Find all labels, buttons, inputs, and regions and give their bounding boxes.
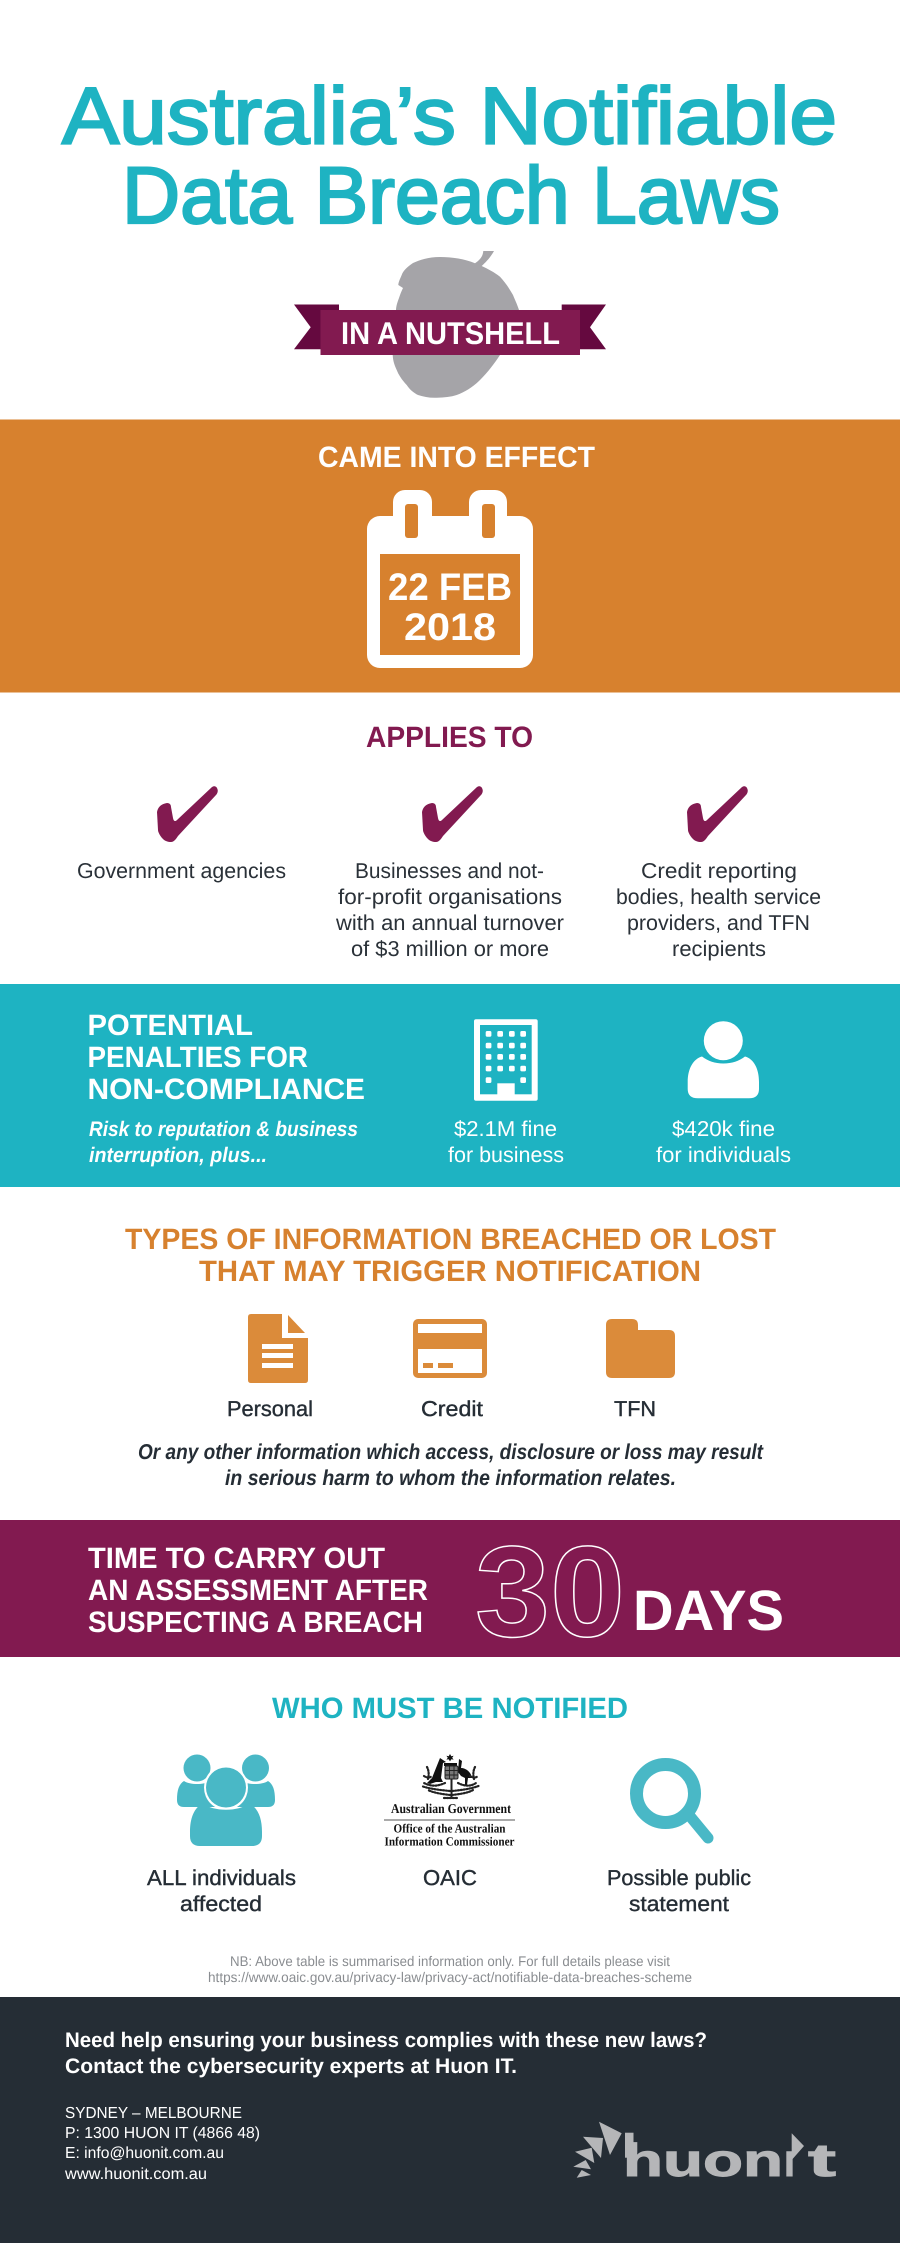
text: credit reporting — [616, 859, 821, 961]
logo: huonit: i — [784, 2134, 795, 2186]
text: business fine: $2.1M fine — [454, 1117, 557, 1141]
icon: check mark 3 — [687, 786, 748, 842]
text: other information — [138, 1440, 764, 1490]
heading: potential penalties: NON-COMPLIANCE — [88, 1073, 365, 1106]
calendar date — [388, 566, 512, 649]
label: public statement — [607, 1866, 751, 1916]
text: credit reporting: Credit reporting — [641, 859, 797, 883]
label: all individuals: ALL individuals — [147, 1866, 296, 1890]
icon: check mark 1 — [157, 786, 218, 842]
label: all individuals — [147, 1866, 296, 1916]
heading: applies to: APPLIES TO — [366, 721, 533, 754]
label: all individuals: affected — [180, 1892, 262, 1916]
crest — [422, 1754, 478, 1798]
heading: time to carry out: AN ASSESSMENT AFTER — [88, 1574, 428, 1607]
text: credit reporting: bodies, health service — [616, 885, 821, 909]
heading: potential penalties — [88, 1009, 365, 1106]
label: personal: Personal — [227, 1397, 313, 1421]
text: government agencies: Government agencies — [77, 859, 286, 883]
text: businesses: for-profit organisations — [338, 885, 562, 909]
ribbon band — [320, 310, 580, 355]
text: business fine: for business — [448, 1143, 564, 1167]
text: businesses: Businesses and not- — [355, 859, 544, 883]
call to action: Need help ensuring your business complies with these new laws? — [65, 2029, 707, 2052]
calendar date: 22 FEB — [388, 566, 512, 609]
panel: footer — [0, 1997, 900, 2243]
calendar date: 2018 — [404, 606, 496, 649]
icon: document — [248, 1314, 308, 1383]
label: public statement: Possible public — [607, 1866, 751, 1890]
contact details: E: info@huonit.com.au — [65, 2145, 224, 2162]
text: other information: Or any other information which access, disclosure or loss may result — [138, 1440, 764, 1464]
ribbon tail right — [562, 304, 606, 349]
contact details: www.huonit.com.au — [64, 2166, 207, 2183]
call to action — [65, 2029, 707, 2078]
icon: folder — [606, 1319, 675, 1378]
number: 30 outline: 30 — [475, 1520, 625, 1664]
logo: huonit: t — [808, 2134, 836, 2186]
contact details: SYDNEY – MELBOURNE — [65, 2105, 242, 2122]
text: credit reporting: providers, and TFN — [627, 911, 810, 935]
heading: potential penalties: PENALTIES FOR — [88, 1041, 308, 1074]
heading: time to carry out: TIME TO CARRY OUT — [88, 1542, 385, 1575]
text: business fine — [448, 1117, 564, 1167]
logo: huonit: huon — [623, 2134, 783, 2186]
icon: office building — [474, 1019, 538, 1101]
title: Data Breach Laws — [122, 151, 780, 241]
subheading: risk: Risk to reputation & business — [89, 1118, 358, 1141]
panel: came into effect — [0, 420, 900, 692]
contact details — [64, 2105, 260, 2183]
text: credit reporting: recipients — [672, 937, 766, 961]
icon: person — [688, 1021, 759, 1098]
label: credit: Credit — [421, 1397, 483, 1421]
text: businesses: with an annual turnover — [335, 911, 564, 935]
heading: types of information — [125, 1223, 776, 1288]
contact details: P: 1300 HUON IT (4866 48) — [65, 2125, 260, 2142]
panel: who must be notified — [147, 1692, 751, 1985]
text: Australian Government: Australian Government — [391, 1801, 511, 1816]
heading: who must be notified: WHO MUST BE NOTIFIED — [272, 1692, 628, 1725]
note: https://www.oaic.gov.au/privacy-law/privacy-act/notifiable-data-breaches-scheme — [208, 1969, 692, 1985]
subheading: risk — [89, 1118, 358, 1167]
logo: huonit — [573, 2122, 836, 2186]
note — [208, 1953, 692, 1985]
icon: credit card — [413, 1319, 487, 1378]
heading: came into effect: CAME INTO EFFECT — [318, 441, 595, 474]
icon: group of people — [177, 1754, 275, 1846]
panel: applies to — [77, 721, 821, 961]
title: Australia’s Notifiable — [62, 72, 837, 162]
ribbon tail left — [294, 304, 339, 349]
logo: OAIC Australian Government — [384, 1754, 515, 1848]
text: individual fine — [656, 1117, 791, 1167]
text: individual fine: $420k fine — [672, 1117, 775, 1141]
text: individual fine: for individuals — [656, 1143, 791, 1167]
icon: calendar — [367, 490, 533, 668]
subheading: risk: interruption, plus... — [89, 1144, 267, 1167]
text: businesses: of $3 million or more — [351, 937, 549, 961]
icon: acorn with ribbon — [294, 251, 606, 398]
text: office of the commissioner — [384, 1822, 515, 1848]
ribbon label: IN A NUTSHELL — [341, 315, 560, 351]
heading: potential penalties: POTENTIAL — [88, 1009, 253, 1042]
text: businesses — [335, 859, 564, 961]
panel: time to assess — [0, 1520, 900, 1664]
text: other information: in serious harm to whom the information relates. — [225, 1466, 676, 1490]
heading: types of information: THAT MAY TRIGGER NOTIFICATION — [199, 1255, 701, 1288]
label: days: DAYS — [633, 1579, 784, 1643]
icon: magnifying glass — [636, 1764, 708, 1838]
heading: time to carry out: SUSPECTING A BREACH — [88, 1606, 423, 1639]
icon: check mark 2 — [422, 786, 483, 842]
icon: acorn — [393, 251, 519, 398]
label: OAIC: OAIC — [423, 1866, 477, 1890]
label: public statement: statement — [629, 1892, 729, 1916]
panel: types of information — [125, 1223, 776, 1490]
text: office of the commissioner: Information Commissioner — [384, 1834, 515, 1848]
heading: types of information: TYPES OF INFORMATION BREACHED OR LOST — [125, 1223, 776, 1256]
note: NB: Above table is summarised information only. For full details please visit — [230, 1953, 670, 1969]
heading: time to carry out — [88, 1542, 428, 1639]
text: office of the commissioner: Office of the Australian — [394, 1822, 506, 1836]
panel: potential penalties — [0, 984, 900, 1187]
call to action: Contact the cybersecurity experts at Huon IT. — [65, 2055, 517, 2078]
title — [62, 72, 837, 241]
label: TFN: TFN — [614, 1397, 656, 1421]
